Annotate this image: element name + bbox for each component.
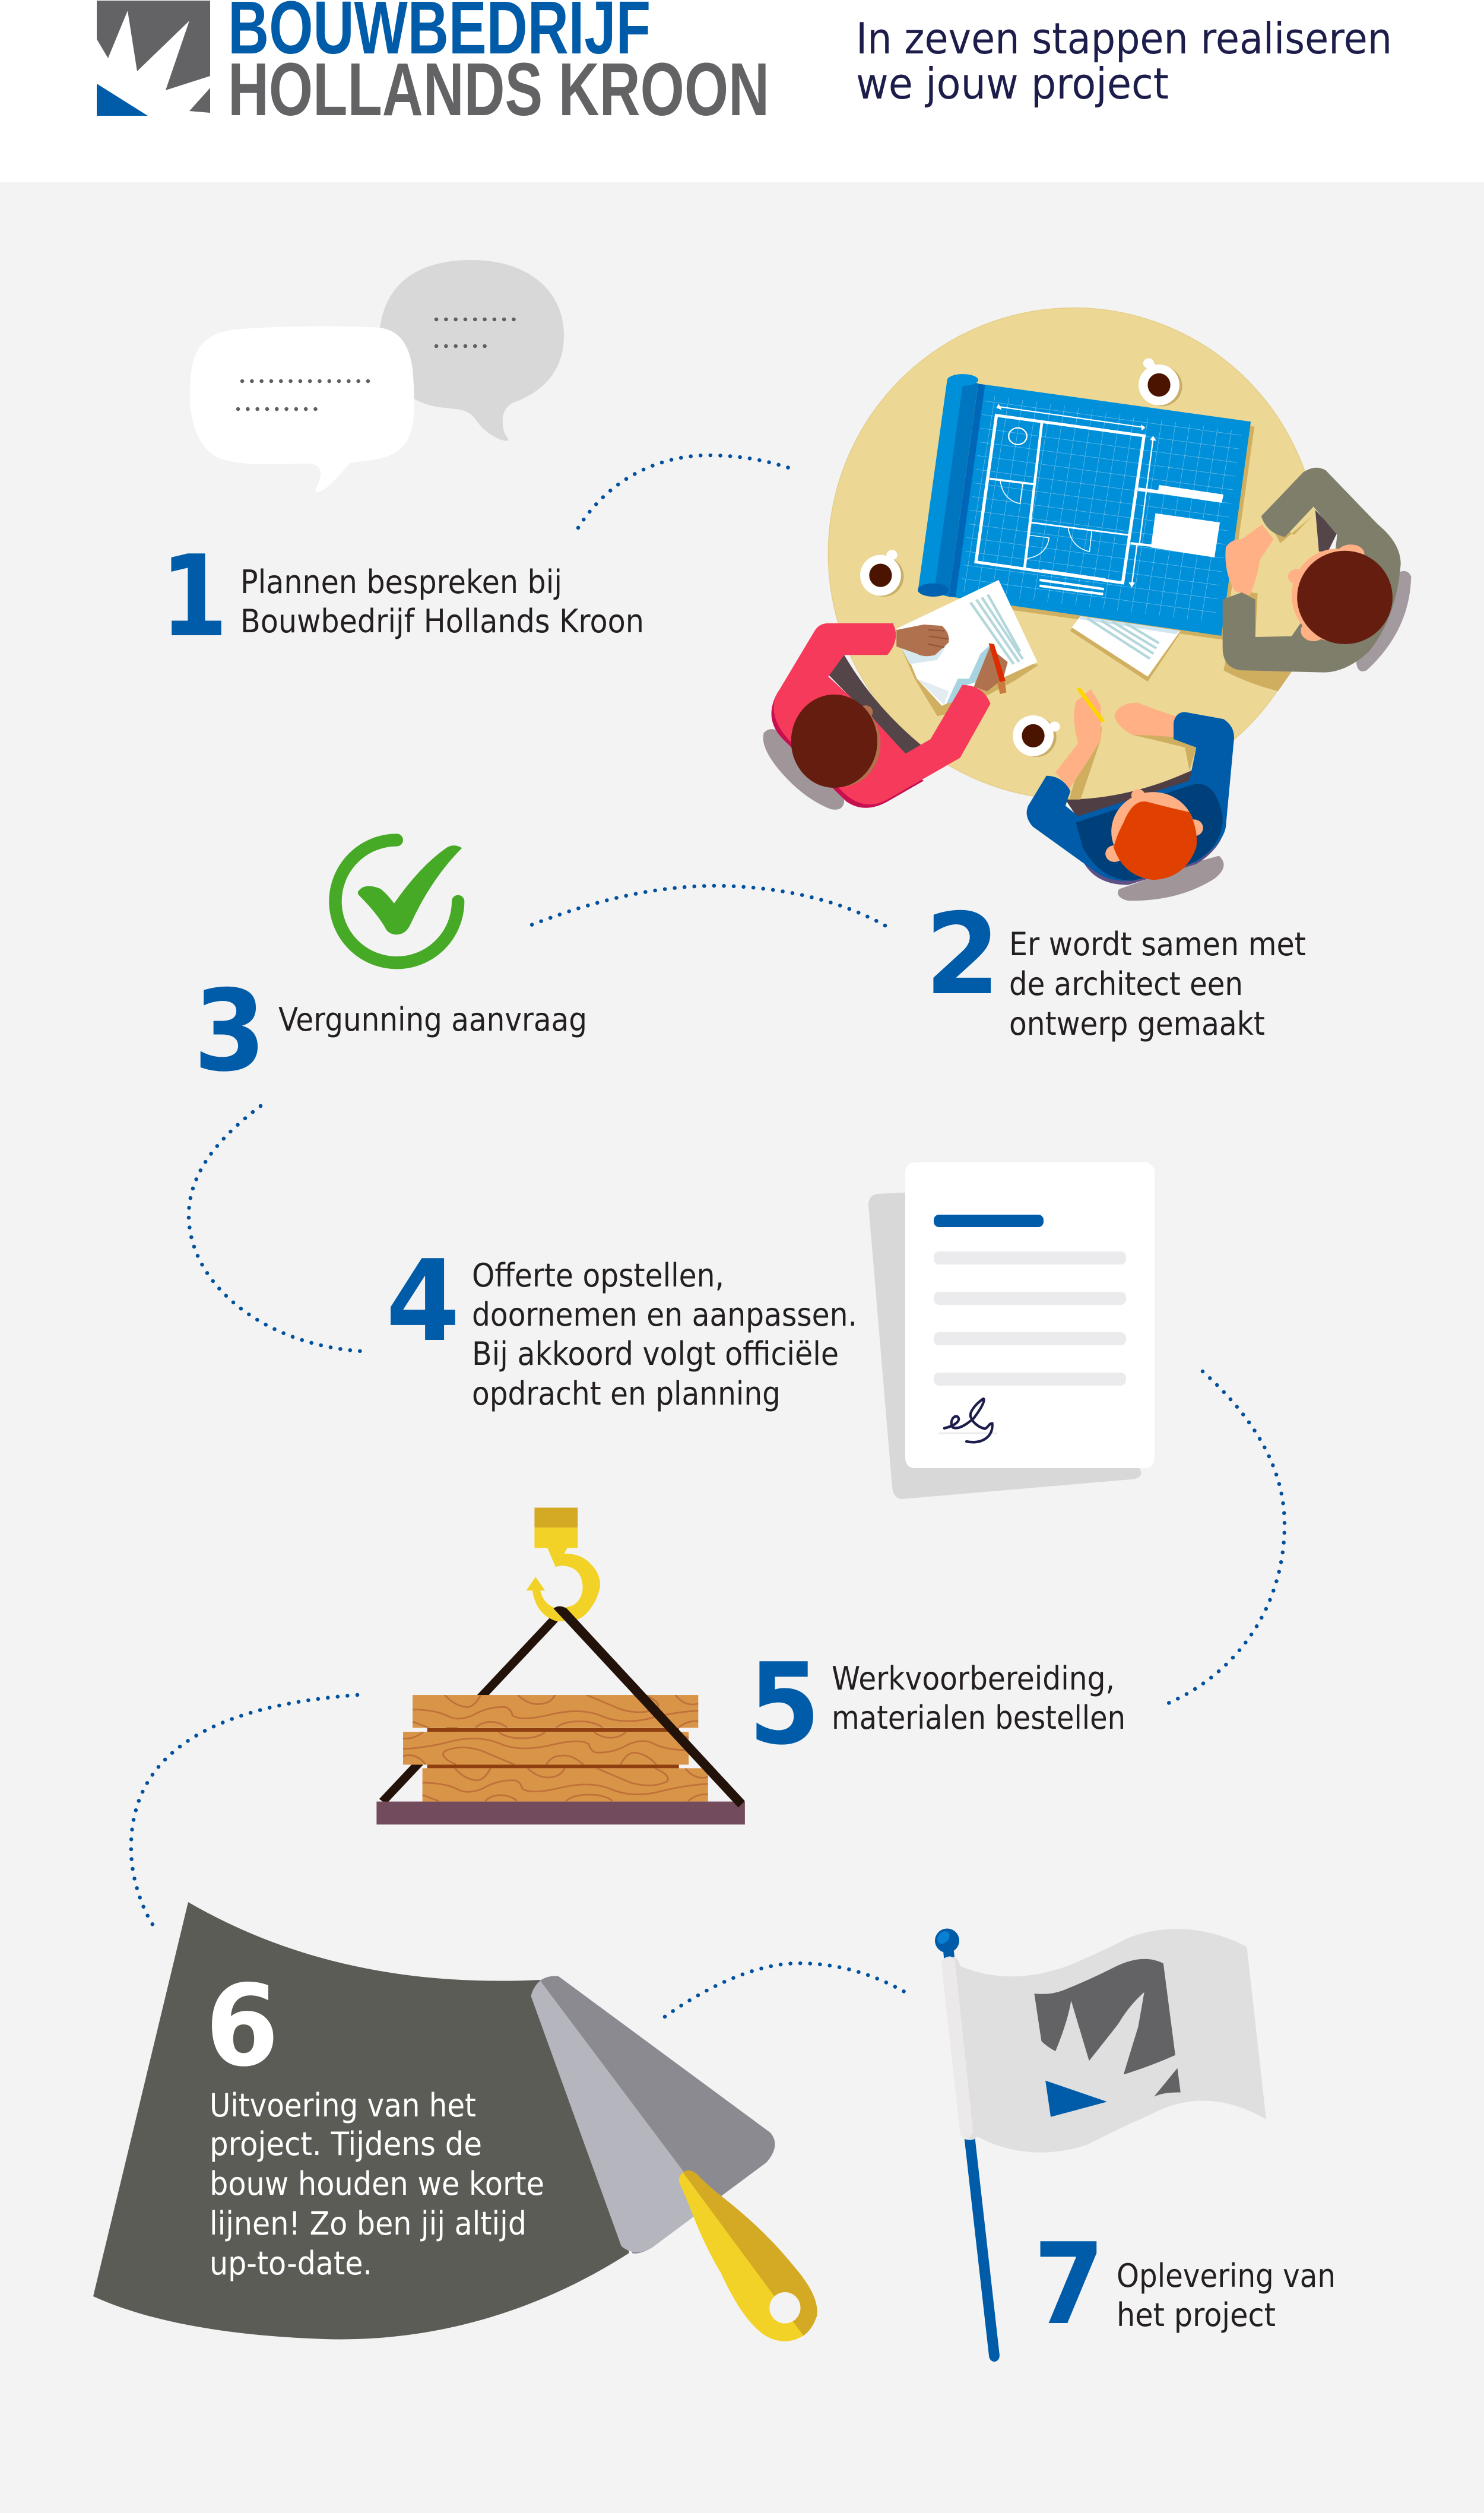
icon: signed document	[868, 1162, 1155, 1499]
step 2 text: Er wordt samen met	[1009, 926, 1306, 963]
step 6 text: lijnen! Zo ben jij altijd	[210, 2205, 527, 2242]
step 3 text: Vergunning aanvraag	[278, 1001, 587, 1038]
person: blue sweater	[1027, 688, 1234, 901]
icon: green check mark	[335, 840, 462, 963]
step 6 text: bouw houden we korte	[210, 2165, 544, 2203]
header tagline: In zeven stappen realiseren	[856, 14, 1392, 64]
step 2 text: de architect een	[1009, 965, 1243, 1003]
paper sheet left	[896, 580, 1039, 716]
step 4 text: opdracht en planning	[472, 1375, 781, 1412]
header tagline	[856, 14, 1392, 109]
step 5 text	[832, 1660, 1125, 1736]
blueprint	[918, 374, 1254, 640]
step 2 text	[1009, 926, 1306, 1042]
icon: speech bubbles	[190, 260, 564, 492]
step 7 text	[1117, 2257, 1336, 2334]
connector 6 to 7	[665, 1963, 912, 2017]
step 6 text	[210, 2087, 544, 2282]
dark panel shape	[93, 1902, 629, 2339]
step 7 number: 7	[1033, 2219, 1105, 2350]
step 4 text: Offerte opstellen,	[472, 1257, 724, 1294]
header logo	[97, 0, 769, 131]
person: grey sweater	[1223, 468, 1411, 691]
icon: trowel	[531, 1976, 817, 2341]
step 6 text: Uitvoering van het	[210, 2087, 476, 2124]
panel: step 6	[93, 1902, 629, 2339]
step 1 text: Bouwbedrijf Hollands Kroon	[240, 603, 644, 640]
step 7 text: het project	[1117, 2296, 1276, 2334]
header tagline: we jouw project	[856, 59, 1169, 109]
step 5 text: materialen bestellen	[832, 1699, 1125, 1736]
step 4 text: Bij akkoord volgt officiële	[472, 1335, 839, 1373]
illustration: meeting around table with blueprint	[763, 308, 1411, 901]
step 3 number: 3	[194, 966, 266, 1097]
step 5 number: 5	[749, 1639, 820, 1770]
step 1 text	[240, 563, 644, 640]
step 1 number: 1	[160, 531, 228, 662]
connector 2 to 3	[528, 886, 885, 926]
logo icon	[97, 1, 210, 116]
step 4 number: 4	[386, 1236, 460, 1367]
logo wordmark	[228, 0, 769, 131]
step 5 text: Werkvoorbereiding,	[832, 1660, 1115, 1697]
front sheet	[905, 1162, 1155, 1468]
step 6 number: 6	[205, 1961, 279, 2091]
cups	[860, 359, 1182, 757]
step 6 text: up-to-date.	[210, 2245, 372, 2282]
table	[828, 308, 1319, 800]
step 4 text	[472, 1257, 857, 1412]
icon: crane hook lifting planks	[376, 1508, 745, 1824]
white speech bubble	[190, 326, 414, 492]
connector 3 to 4	[189, 1106, 362, 1351]
step 4 text: doornemen en aanpassen.	[472, 1296, 857, 1333]
step 7 text: Oplevering van	[1117, 2257, 1336, 2295]
connector 1 to 2	[578, 455, 791, 528]
step 2 number: 2	[925, 889, 1000, 1020]
connector 4 to 5	[1168, 1371, 1285, 1703]
icon: company flag	[935, 1928, 1266, 2356]
logo wordmark: HOLLANDS KROON	[228, 47, 769, 131]
step 2 text: ontwerp gemaakt	[1009, 1005, 1265, 1042]
paper sheet right	[1070, 616, 1181, 682]
connector 5 to 6	[131, 1695, 357, 1931]
step 1 text: Plannen bespreken bij	[240, 563, 562, 601]
back sheet	[868, 1187, 1141, 1499]
grey speech bubble	[380, 260, 564, 441]
step 6 text: project. Tijdens de	[210, 2125, 482, 2163]
person: pink sweater	[763, 623, 1008, 810]
